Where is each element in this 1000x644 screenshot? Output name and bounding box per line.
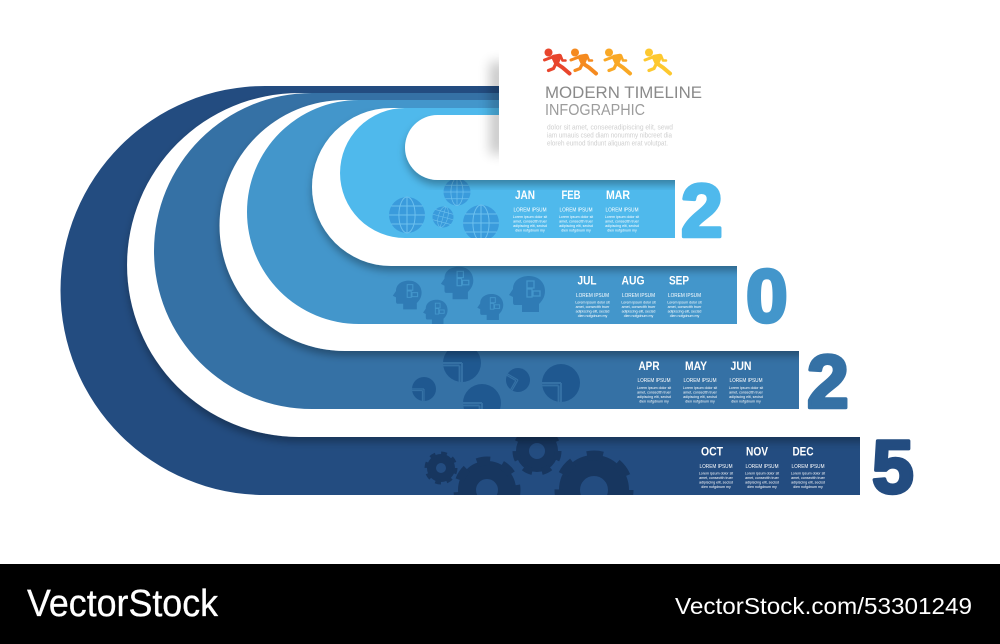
months: Jan Feb Mar: amet, consectth truer <box>513 220 548 224</box>
description: iam umauis csed diam nonummy nibcreet dia <box>547 132 672 140</box>
months: Apr May Jun: JUN <box>730 359 752 373</box>
globe icons <box>389 178 499 241</box>
months: Oct Nov Dec <box>699 444 826 489</box>
months: Oct Nov Dec: OCT <box>701 444 724 458</box>
months: Apr May Jun: LOREM IPSUM <box>730 378 763 384</box>
months: Jul Aug Sep <box>575 274 702 318</box>
months: Oct Nov Dec: adipiscing elit, secisd <box>791 480 825 484</box>
months: Jul Aug Sep: adipiscing elit, secisd <box>668 310 701 314</box>
months: Jan Feb Mar: LOREM IPSUM <box>606 208 639 214</box>
image id: VectorStock.com/53301249 <box>675 593 972 619</box>
months: Oct Nov Dec: amet, consectth truer <box>791 476 826 480</box>
title: MODERN TIMELINE <box>545 83 702 102</box>
months: Apr May Jun: amet, consectth truer <box>683 390 718 394</box>
months: Jan Feb Mar: dien nofgdnum my <box>607 228 637 232</box>
months: Jan Feb Mar: Lorem ipsum dolor sit <box>513 215 547 219</box>
months: Oct Nov Dec: amet, consectth truer <box>699 476 734 480</box>
band: light blue Q1 swoosh <box>340 108 675 238</box>
subtitle: INFOGRAPHIC <box>545 102 645 119</box>
months: Jan Feb Mar: FEB <box>562 188 581 202</box>
months: Oct Nov Dec: Lorem ipsum dolor sit <box>745 472 779 476</box>
months: Jul Aug Sep: Lorem ipsum dolor sit <box>667 300 702 304</box>
months: Oct Nov Dec: LOREM IPSUM <box>700 464 733 470</box>
white inner pocket <box>401 115 675 190</box>
months: Jul Aug Sep: LOREM IPSUM <box>622 293 655 299</box>
months: Apr May Jun: Lorem ipsum dolor sit <box>683 386 717 390</box>
months: Jul Aug Sep: amet, consectth truer <box>576 305 610 309</box>
months: Jul Aug Sep: LOREM IPSUM <box>576 293 609 299</box>
year digit 0: 0 <box>746 254 788 338</box>
months: Apr May Jun: amet, consectth truer <box>637 390 672 394</box>
months: Apr May Jun: Lorem ipsum dolor sit <box>729 386 763 390</box>
months: Jan Feb Mar: Lorem ipsum dolor sit <box>605 215 639 219</box>
months: Jan Feb Mar: amet, consectth truer <box>605 220 640 224</box>
months: Apr May Jun: Lorem ipsum dolor sit <box>637 386 671 390</box>
months: Jul Aug Sep: Lorem ipsum dolor sit <box>575 300 610 304</box>
brand name: VectorStock <box>27 583 219 625</box>
months: Oct Nov Dec: amet, consectth truer <box>745 476 780 480</box>
months: Apr May Jun: adipiscing elit, secisd <box>637 395 671 399</box>
months: Jul Aug Sep: amet, consectth truer <box>668 305 702 309</box>
months: Jan Feb Mar: adipiscing elit, secisd <box>513 224 547 228</box>
months: Jul Aug Sep: JUL <box>578 274 596 288</box>
months: Apr May Jun: LOREM IPSUM <box>638 378 671 384</box>
year digit 2: 2 <box>681 168 723 252</box>
months: Jan Feb Mar: adipiscing elit, secisd <box>605 224 639 228</box>
months: Oct Nov Dec: dien nofgdnum my <box>701 485 731 489</box>
white gap above medium light band <box>308 108 737 275</box>
year digit 5: 5 <box>872 425 914 509</box>
months: Jul Aug Sep: dien nofgdnum my <box>624 314 653 318</box>
months: Jan Feb Mar: JAN <box>515 188 535 202</box>
months: Jan Feb Mar: adipiscing elit, secisd <box>559 224 593 228</box>
description: dolor sit amet, conseeradipiscing elit, sewd <box>547 124 673 132</box>
months: Jan Feb Mar: amet, consectth truer <box>559 220 594 224</box>
year digit 2: 2 <box>807 340 849 424</box>
months: Jul Aug Sep: SEP <box>669 274 689 288</box>
band: medium light blue Q3 swoosh <box>247 100 737 324</box>
months: Apr May Jun: APR <box>638 359 660 373</box>
months: Jul Aug Sep: adipiscing elit, secisd <box>576 310 609 314</box>
months: Jul Aug Sep: adipiscing elit, secisd <box>622 310 655 314</box>
months: Jul Aug Sep: dien nofgdnum my <box>578 314 607 318</box>
months: Apr May Jun: amet, consectth truer <box>729 390 764 394</box>
months: Oct Nov Dec: DEC <box>792 444 814 458</box>
months: Apr May Jun: LOREM IPSUM <box>684 378 717 384</box>
months: Jan Feb Mar: dien nofgdnum my <box>561 228 591 232</box>
months: Apr May Jun <box>637 359 764 404</box>
band: mid blue Q2 swoosh <box>154 93 799 409</box>
months: Oct Nov Dec: Lorem ipsum dolor sit <box>699 472 733 476</box>
months: Jan Feb Mar: LOREM IPSUM <box>514 208 547 214</box>
months: Jan Feb Mar <box>513 188 640 232</box>
months: Oct Nov Dec: LOREM IPSUM <box>792 464 825 470</box>
gear icons <box>424 437 634 495</box>
months: Jul Aug Sep: amet, consectth truer <box>622 305 656 309</box>
runner icons <box>544 48 670 74</box>
description: eloreh eumod tindunt aliquam erat volutpat. <box>547 140 668 148</box>
months: Jan Feb Mar: MAR <box>606 188 630 202</box>
months: Oct Nov Dec: NOV <box>746 444 768 458</box>
white gap above dark band <box>124 93 860 445</box>
months: Jul Aug Sep: AUG <box>622 274 644 288</box>
months: Apr May Jun: MAY <box>685 359 707 373</box>
months: Oct Nov Dec: Lorem ipsum dolor sit <box>791 472 825 476</box>
months: Jan Feb Mar: LOREM IPSUM <box>560 208 593 214</box>
months: Apr May Jun: adipiscing elit, secisd <box>729 395 763 399</box>
months: Apr May Jun: dien nofgdnum my <box>639 400 669 404</box>
months: Apr May Jun: dien nofgdnum my <box>731 400 761 404</box>
months: Jul Aug Sep: Lorem ipsum dolor sit <box>621 300 656 304</box>
footer bar <box>0 564 1000 644</box>
months: Jul Aug Sep: LOREM IPSUM <box>668 293 701 299</box>
months: Jan Feb Mar: Lorem ipsum dolor sit <box>559 215 593 219</box>
months: Oct Nov Dec: dien nofgdnum my <box>747 485 777 489</box>
months: Oct Nov Dec: adipiscing elit, secisd <box>745 480 779 484</box>
months: Oct Nov Dec: adipiscing elit, secisd <box>699 480 733 484</box>
months: Jul Aug Sep: dien nofgdnum my <box>670 314 699 318</box>
band: dark blue Q4 swoosh <box>61 86 860 495</box>
head icons <box>393 267 545 324</box>
months: Jan Feb Mar: dien nofgdnum my <box>515 228 545 232</box>
months: Apr May Jun: dien nofgdnum my <box>685 400 715 404</box>
pie chart icons <box>412 351 580 409</box>
months: Apr May Jun: adipiscing elit, secisd <box>683 395 717 399</box>
title panel <box>490 48 714 165</box>
months: Oct Nov Dec: dien nofgdnum my <box>793 485 823 489</box>
months: Oct Nov Dec: LOREM IPSUM <box>746 464 779 470</box>
white gap above mid band <box>216 100 799 360</box>
description <box>547 124 673 148</box>
